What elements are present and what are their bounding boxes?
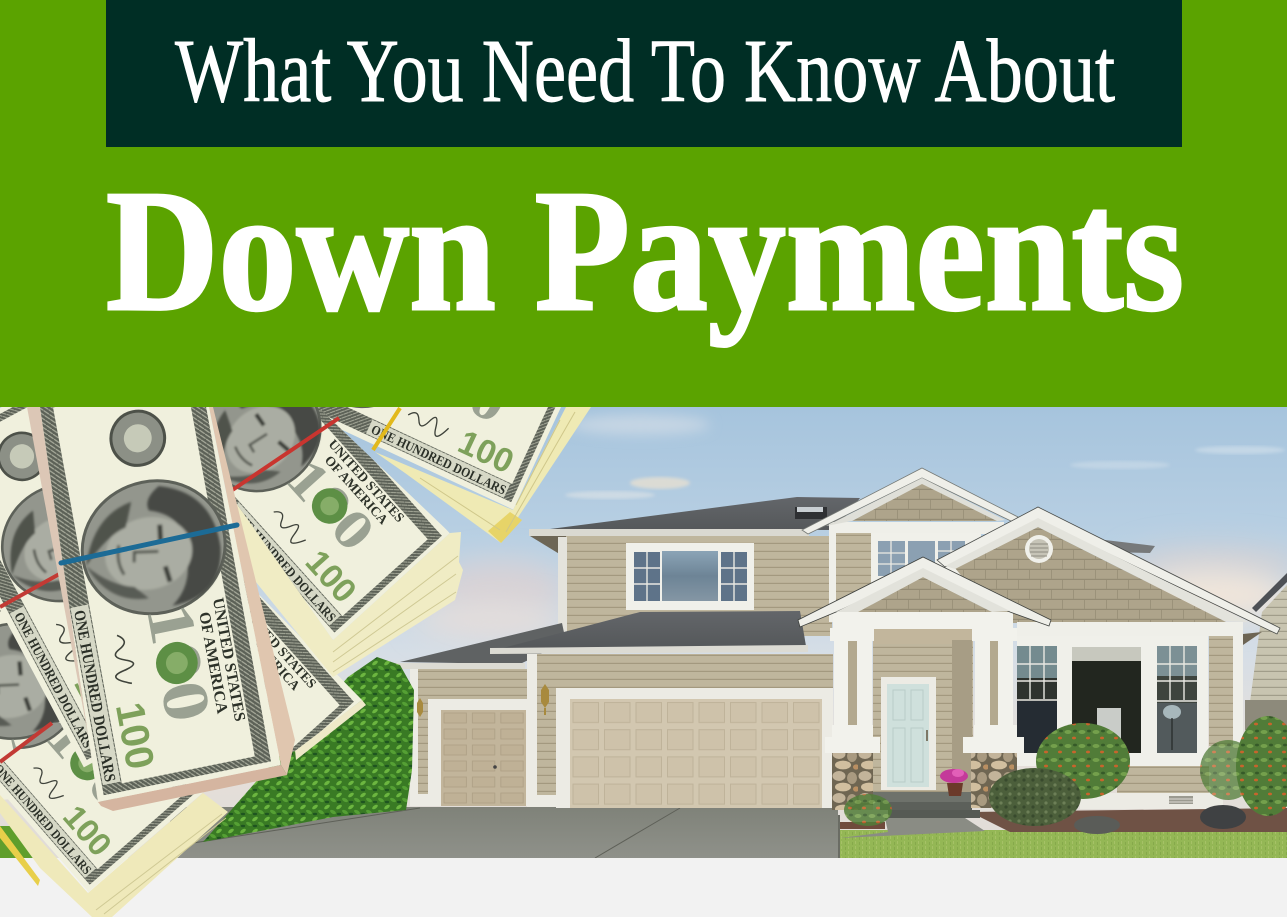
hedge <box>203 657 414 842</box>
small garage door <box>410 669 528 806</box>
upper gable <box>802 468 1018 534</box>
bay windows <box>1017 636 1208 766</box>
stack: middle left <box>0 376 227 767</box>
neighbouring house <box>1245 573 1287 730</box>
red rubber band: upper left <box>0 572 63 607</box>
house photo <box>0 407 1287 858</box>
lower page strip <box>0 858 1287 917</box>
lower front wall and foundation <box>1080 766 1223 809</box>
centre window <box>1072 647 1141 753</box>
mid roof <box>490 611 808 654</box>
left column <box>825 628 880 810</box>
front gable <box>937 507 1280 634</box>
driveway <box>170 807 840 858</box>
yellow rubber band <box>373 408 400 450</box>
money stacks <box>0 407 591 917</box>
porch gable <box>798 557 1051 629</box>
back roof peak <box>1105 540 1155 553</box>
grass corner <box>0 826 36 858</box>
round gable vent <box>1025 535 1053 563</box>
right window <box>1157 646 1197 753</box>
main lower wall <box>537 654 833 796</box>
porch steps <box>873 792 980 818</box>
left lower roof <box>395 623 566 669</box>
porch interior <box>873 628 973 793</box>
lower left wall <box>418 669 528 794</box>
lawn and mulch <box>838 808 1287 858</box>
upper gable side wall <box>829 522 1004 623</box>
right column <box>963 628 1024 808</box>
red rubber band: lower left <box>0 723 52 762</box>
porch columns <box>825 628 1024 810</box>
blue rubber band <box>61 525 237 563</box>
stack: top right <box>199 220 591 543</box>
green header background <box>0 0 1287 407</box>
red rubber band: centre stack <box>228 418 339 493</box>
large garage door <box>556 688 833 808</box>
flower pot <box>940 769 968 796</box>
shrubs <box>844 716 1287 826</box>
garden rocks <box>1074 805 1246 834</box>
sky <box>0 407 1287 858</box>
stack: bottom left <box>0 542 228 917</box>
left window <box>1017 646 1057 753</box>
main heading: Down Payments: Down Payments <box>106 154 1184 347</box>
stack: under middle <box>14 443 366 806</box>
wall lanterns <box>417 684 549 717</box>
stack: under left <box>0 520 131 903</box>
right side wall and eave band <box>1017 622 1262 748</box>
stack: upper left <box>0 397 146 780</box>
upper roof <box>529 497 860 558</box>
front door <box>881 677 936 790</box>
post between garages <box>527 654 556 807</box>
top title band <box>106 0 1182 147</box>
upper window <box>626 543 754 610</box>
stack: centre <box>102 277 463 677</box>
upper storey wall <box>558 536 832 636</box>
stack: front <box>24 362 295 811</box>
